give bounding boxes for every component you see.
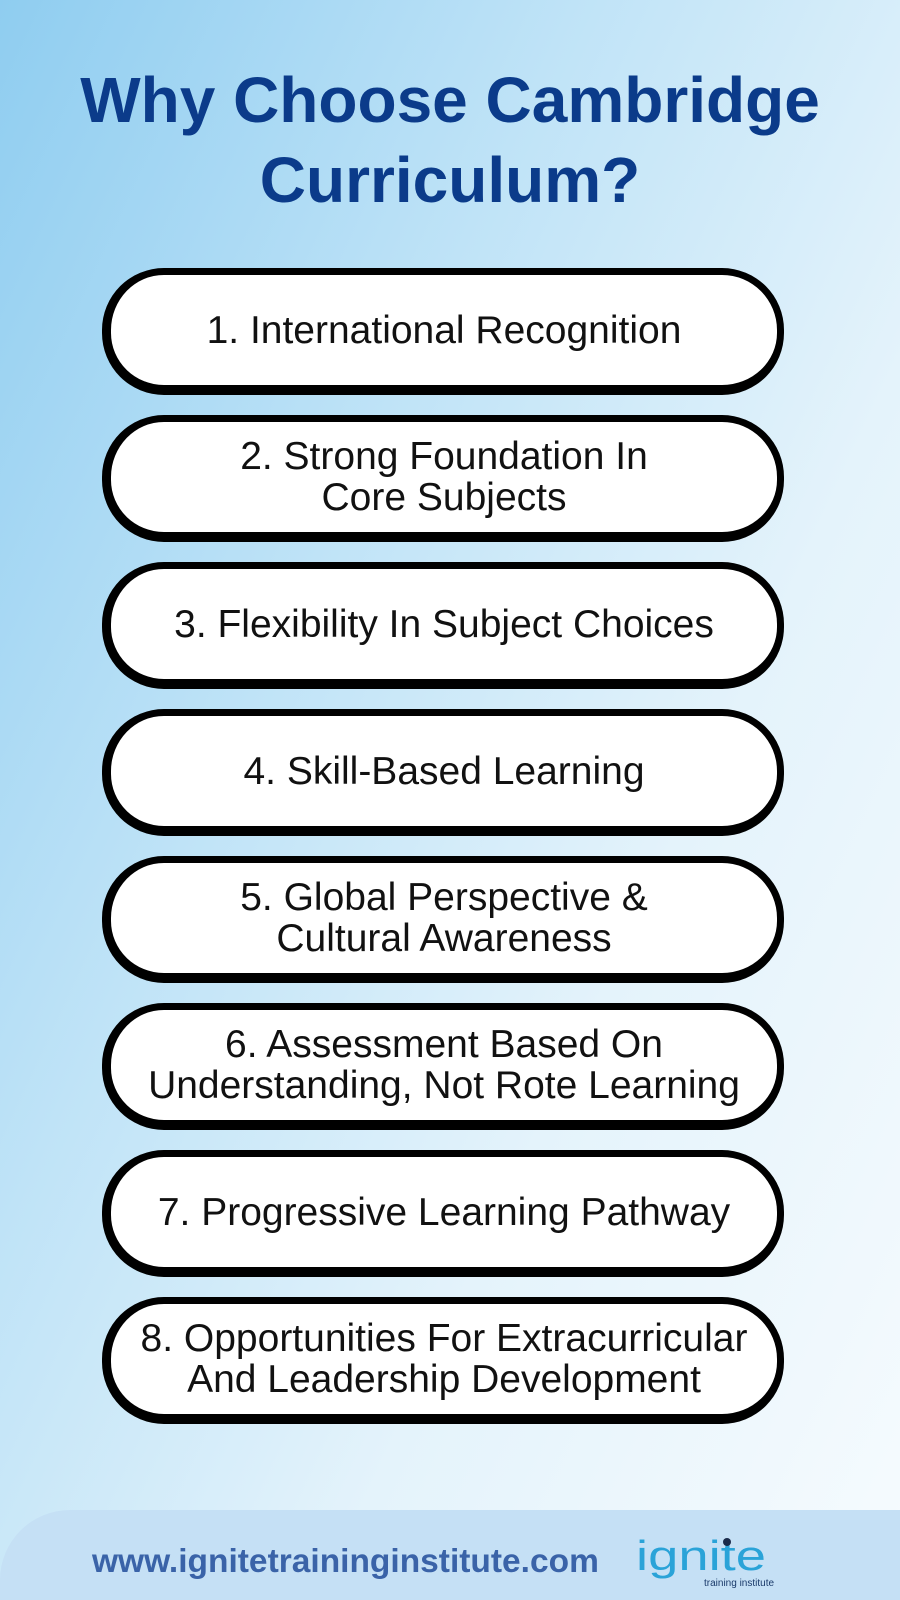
footer band [0, 1510, 900, 1600]
footer url: www.ignitetraininginstitute.com [92, 1543, 599, 1580]
pill 8: 8. Opportunities For Extracurricular [141, 1317, 747, 1360]
pill 2 [102, 415, 784, 542]
pill 8 [102, 1297, 784, 1424]
logo: ignite: ignite [636, 1532, 766, 1579]
pill 5: 5. Global Perspective & [240, 876, 648, 919]
pill 7: 7. Progressive Learning Pathway [158, 1190, 730, 1234]
pill 7 [102, 1150, 784, 1277]
pill 4: 4. Skill-Based Learning [243, 750, 645, 792]
pill 6: Understanding, Not Rote Learning [148, 1064, 740, 1107]
pill 3 [102, 562, 784, 689]
pill 5: Cultural Awareness [276, 917, 612, 960]
pill 6 [102, 1003, 784, 1130]
title: Why Choose Cambridge [80, 64, 820, 136]
pill 2: 2. Strong Foundation In [240, 435, 648, 478]
pill 4 [102, 709, 784, 836]
title: Curriculum? [260, 144, 640, 216]
pill 1: 1. International Recognition [207, 308, 681, 352]
pill 8: And Leadership Development [187, 1358, 701, 1401]
logo: ignite: training institute [704, 1578, 774, 1589]
logo: ignite [636, 1532, 774, 1589]
pill 5 [102, 856, 784, 983]
title [80, 64, 820, 216]
pill 2: Core Subjects [322, 476, 566, 519]
pill 6: 6. Assessment Based On [225, 1023, 663, 1066]
pill 3: 3. Flexibility In Subject Choices [174, 602, 714, 646]
pill 1 [102, 268, 784, 395]
